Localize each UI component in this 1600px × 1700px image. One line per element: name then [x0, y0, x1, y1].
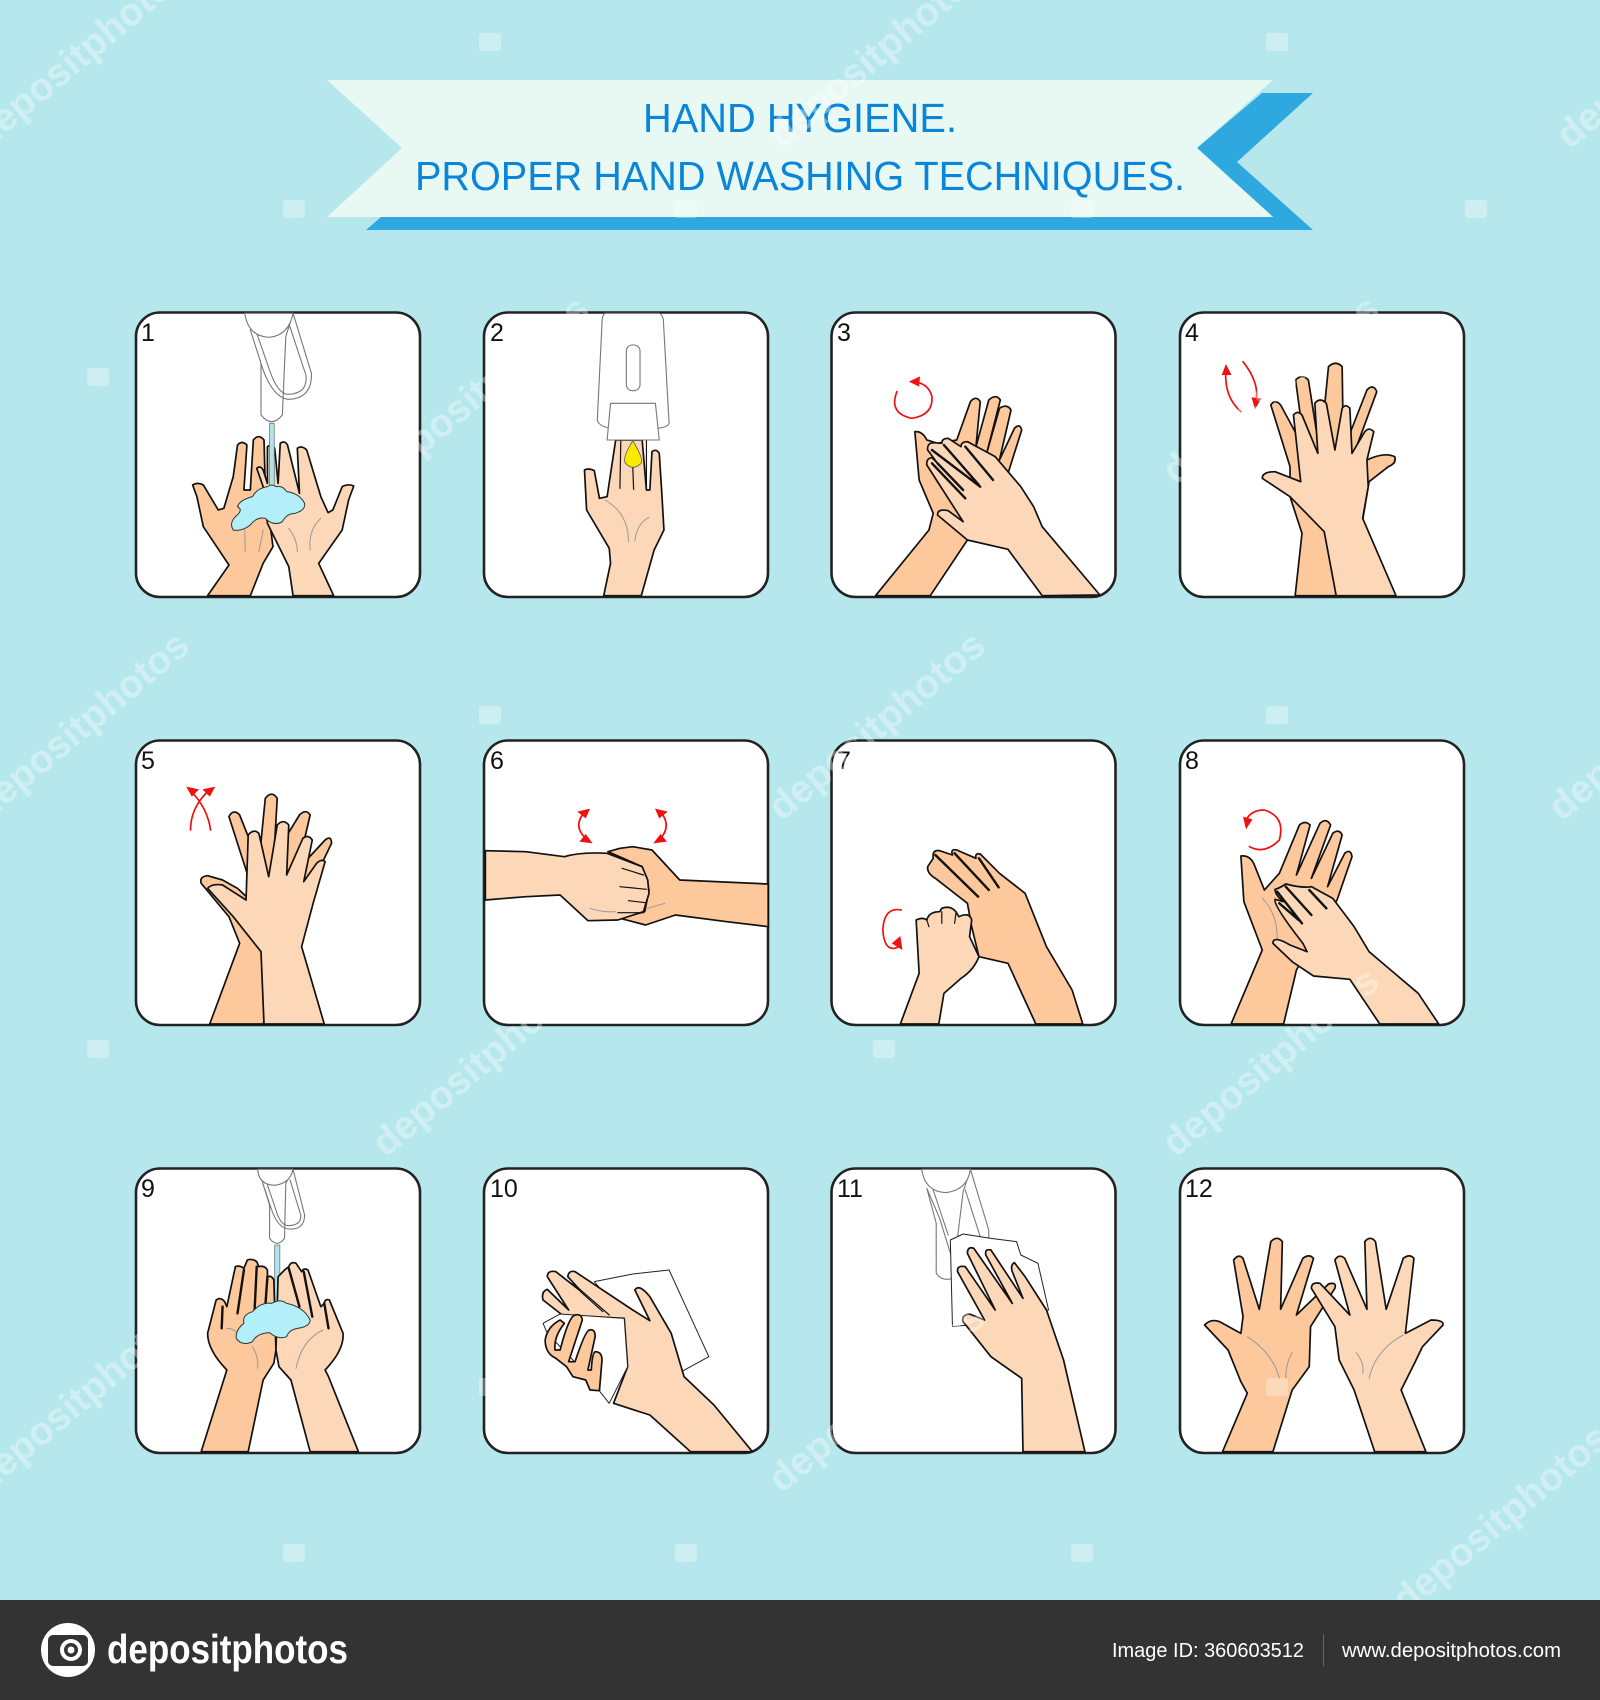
title text: [415, 95, 1185, 199]
panel: step 5: 5: [141, 747, 155, 775]
panel: step 9: 9: [141, 1175, 155, 1203]
title text: HAND HYGIENE.: [643, 95, 957, 141]
watermark overlay: depositphotos: [1154, 287, 1388, 493]
panel: step 2: [484, 312, 768, 597]
panel: step 4: [1180, 312, 1464, 597]
panel: step 7: [832, 740, 1116, 1025]
panel: step 5: [136, 740, 420, 1025]
panel: step 8: 8: [1185, 747, 1199, 775]
panel: step 12: [1180, 1168, 1464, 1453]
image id: Image ID: 360603512: [1112, 1640, 1304, 1662]
watermark overlay: depositphotos: [760, 1295, 994, 1501]
panel: step 1: 1: [141, 319, 155, 347]
site url: www.depositphotos.com: [1341, 1640, 1561, 1662]
logo wordmark: depositphotos: [107, 1626, 348, 1672]
panel: step 3: 3: [837, 319, 851, 347]
panel: step 1: [136, 312, 420, 597]
icon: camera logo: [41, 1623, 95, 1677]
watermark overlay: depositphotos: [364, 959, 598, 1165]
panel: step 11: [832, 1168, 1116, 1453]
panel: step 2: 2: [490, 319, 504, 347]
panel: step 4: 4: [1185, 319, 1199, 347]
panel: step 12: 12: [1185, 1175, 1213, 1203]
watermark overlay: depositphotos: [1154, 959, 1388, 1165]
panel: step 11: 11: [837, 1175, 863, 1203]
panel: step 6: 6: [490, 747, 504, 775]
panel: step 3: [832, 312, 1116, 597]
panel: step 10: [484, 1168, 768, 1453]
watermark overlay: depositphotos: [364, 287, 598, 493]
panel: step 9: [136, 1168, 420, 1453]
panel: step 8: [1180, 740, 1464, 1025]
panel: step 10: 10: [490, 1175, 518, 1203]
footer bar: [0, 1600, 1600, 1700]
panel: step 6: [484, 740, 768, 1025]
watermark overlay: depositphotos: [760, 623, 994, 829]
title text: PROPER HAND WASHING TECHNIQUES.: [415, 153, 1185, 199]
panel: step 7: 7: [837, 747, 851, 775]
title ribbon: [327, 80, 1313, 230]
